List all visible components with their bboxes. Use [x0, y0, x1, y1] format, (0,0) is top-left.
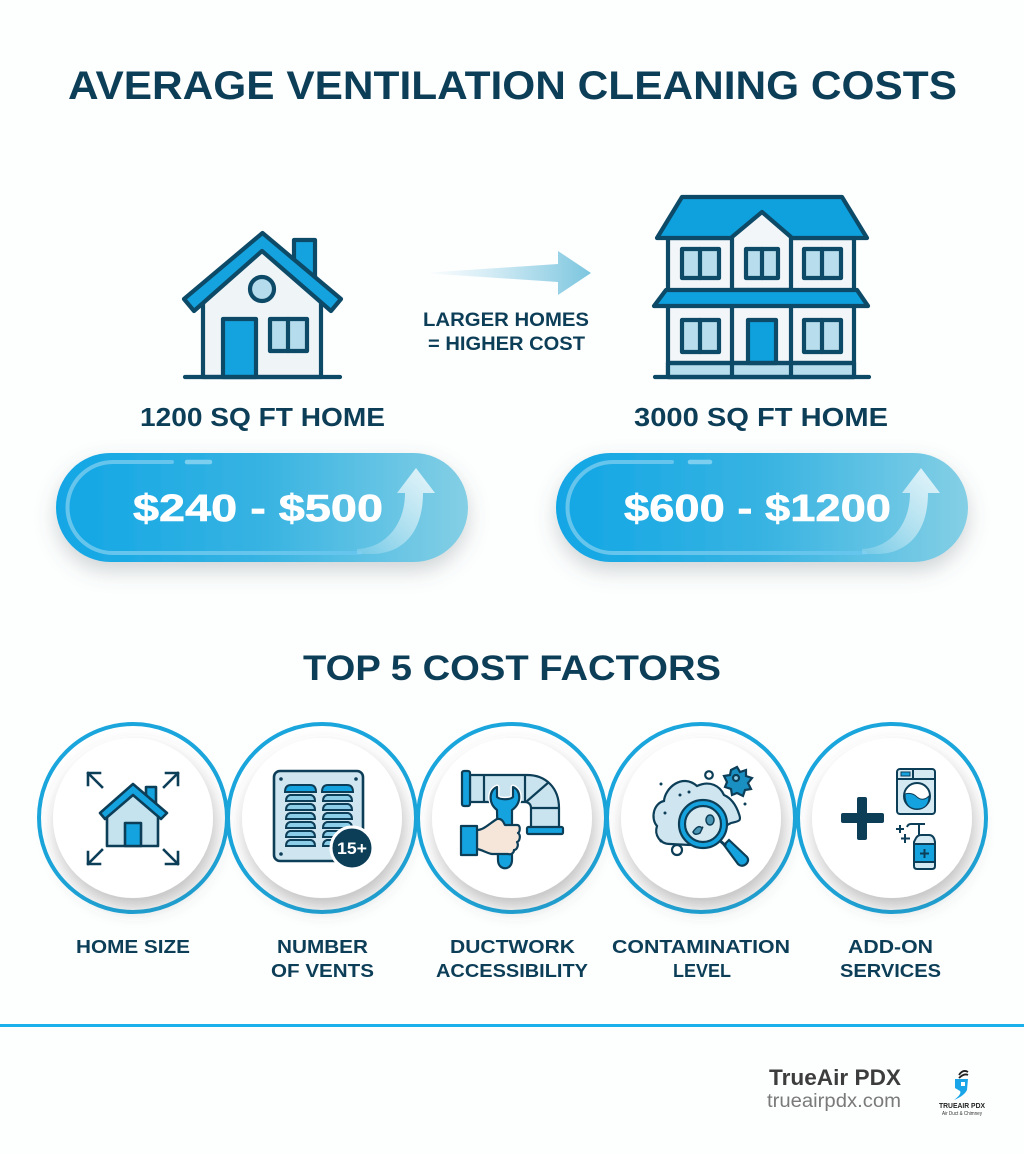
label: 3000 sq ft home: 3000 SQ FT HOME [634, 402, 888, 432]
icon: plus, washer and bottle [841, 769, 935, 869]
icon: expanding house [88, 773, 178, 864]
price pill: $240 - $500 [56, 453, 468, 562]
icon: vent grille with 15+ badge [274, 771, 373, 869]
heading: top 5 cost factors: TOP 5 COST FACTORS [303, 649, 721, 688]
brand url: trueairpdx.com [767, 1091, 901, 1112]
label: 1200 sq ft home: 1200 SQ FT HOME [140, 402, 385, 432]
logo [939, 1071, 985, 1117]
arrow [423, 251, 591, 295]
label: NUMBER [277, 936, 368, 957]
callout text [423, 309, 589, 355]
label [271, 936, 374, 981]
factor: add-on services [798, 724, 986, 981]
price pill: $600 - $1200 [556, 453, 968, 562]
label [612, 936, 790, 981]
label: HOME SIZE [76, 936, 190, 957]
logo: TRUEAIR PDX [939, 1101, 985, 1110]
brand name: TrueAir PDX [769, 1065, 901, 1090]
icon: large house [654, 197, 869, 377]
icon: small house [184, 233, 341, 377]
factor: contamination level [607, 724, 795, 981]
price pill: $240 - $500: $240 - $500 [133, 488, 383, 530]
label: ADD-ON [848, 936, 933, 957]
label: SERVICES [840, 960, 941, 981]
panel: large home [556, 197, 968, 562]
panel: small home [56, 233, 468, 562]
label: LEVEL [673, 960, 731, 981]
label: OF VENTS [271, 960, 374, 981]
footer: brand [767, 1065, 985, 1117]
price pill: $600 - $1200: $600 - $1200 [624, 488, 891, 530]
icon: contamination magnifier [653, 767, 752, 866]
label: CONTAMINATION [612, 936, 790, 957]
label: ACCESSIBILITY [436, 960, 589, 981]
icon: duct and wrench in hand [461, 771, 563, 868]
factor: home size [39, 724, 227, 957]
title: AVERAGE VENTILATION CLEANING COSTS [68, 64, 957, 108]
label: DUCTWORK [450, 936, 576, 957]
factor: number of vents [228, 724, 416, 981]
label [436, 936, 589, 981]
callout text: LARGER HOMES [423, 309, 589, 331]
logo: Air Duct & Chimney [942, 1111, 982, 1117]
callout: larger homes arrow [423, 251, 591, 355]
factor: ductwork accessibility [418, 724, 606, 981]
icon: vent grille with 15+ badge: 15+ [337, 839, 367, 858]
label [840, 936, 941, 981]
callout text: = HIGHER COST [428, 333, 585, 355]
